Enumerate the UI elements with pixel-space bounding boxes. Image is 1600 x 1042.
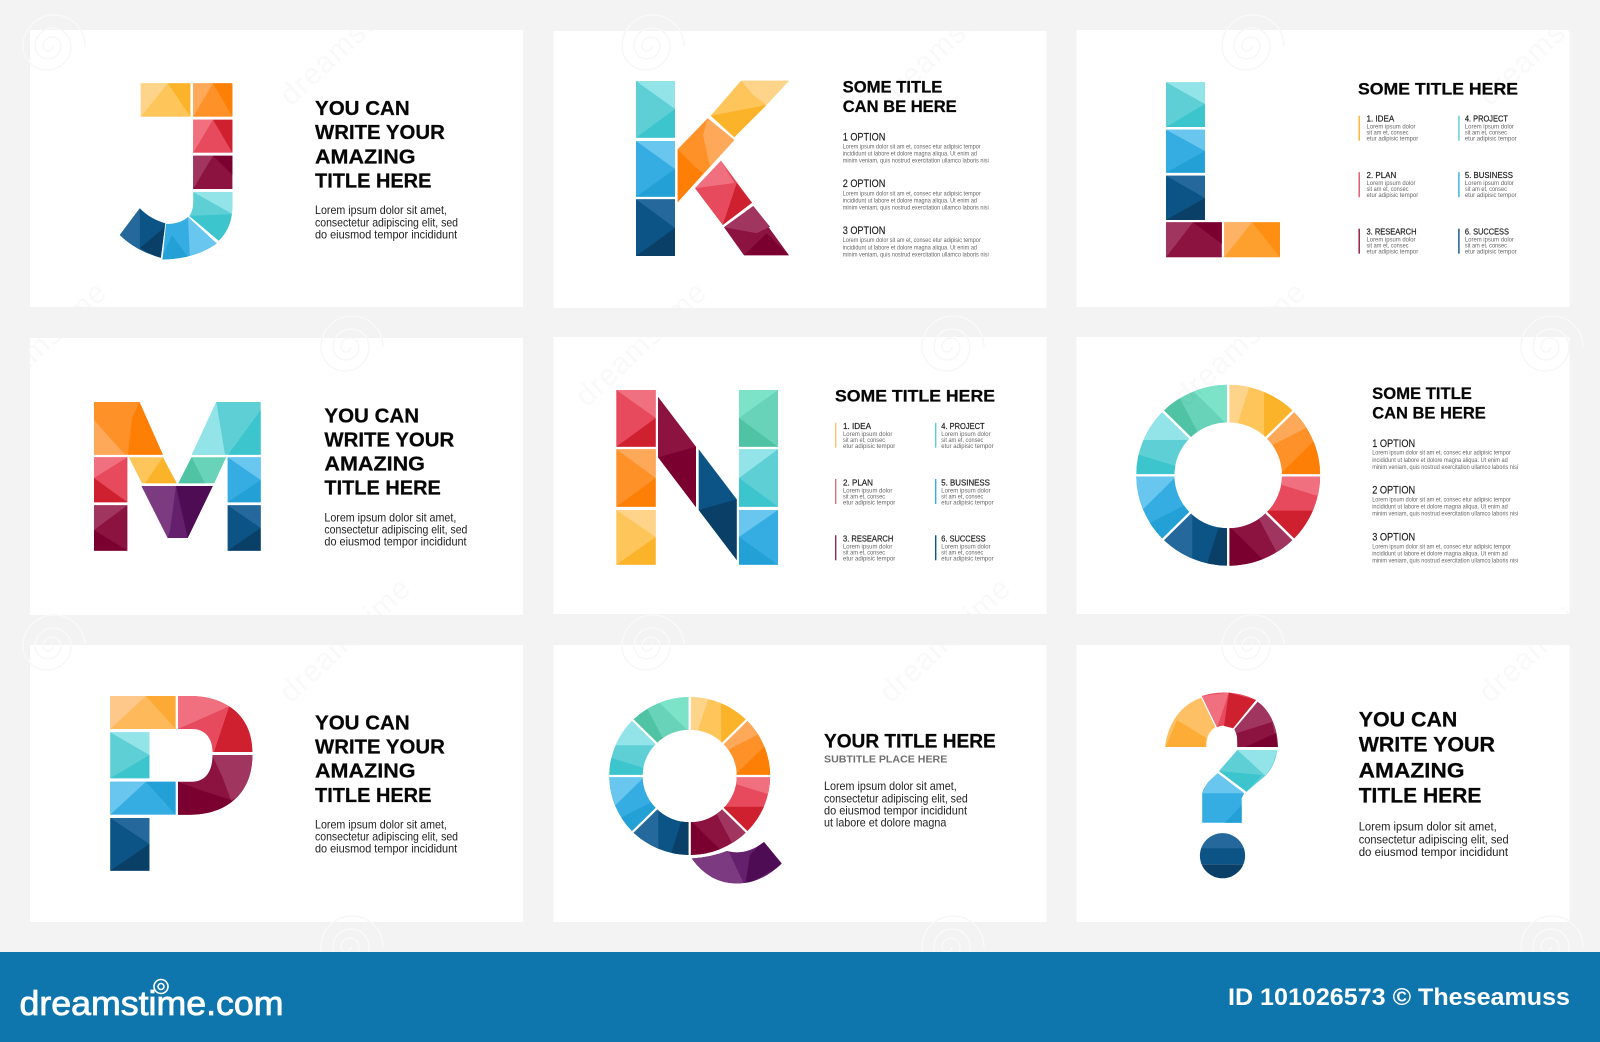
tile: purple <box>142 486 213 538</box>
tile: yellow <box>110 696 176 729</box>
items N: 6. SUCCESS <box>941 535 986 544</box>
watermark over panels: dreamstime <box>569 275 714 413</box>
options O: Lorem ipsum dolor sit am et, consec etur adipisic tempor <box>1372 544 1511 550</box>
title J: WRITE YOUR <box>315 121 445 144</box>
segment: red <box>1267 476 1320 538</box>
segment: red <box>724 777 770 831</box>
segment: green <box>634 697 689 743</box>
segment: yellow <box>690 697 746 743</box>
items L: 6. SUCCESS <box>1465 227 1509 236</box>
tile: maroon <box>193 156 232 189</box>
logo spiral <box>154 980 168 994</box>
items N: Lorem ipsum dolor <box>941 432 991 438</box>
tile: light blue <box>739 510 778 565</box>
title J: AMAZING <box>315 145 416 168</box>
title M: YOU CAN <box>324 404 419 427</box>
options O: 1 OPTION <box>1372 438 1415 450</box>
items N: sit am et, consec <box>941 551 983 557</box>
items N: Lorem ipsum dolor <box>941 545 991 551</box>
tile: orange arm <box>678 118 734 202</box>
options K: 3 OPTION <box>843 225 885 237</box>
tile: yellow <box>129 457 177 483</box>
body J: do eiusmod tempor incididunt <box>315 228 458 241</box>
title M: TITLE HERE <box>324 477 441 500</box>
body Q: ut labore et dolore magna <box>824 817 947 830</box>
tile: teal curve <box>1219 750 1277 792</box>
items N: 3. RESEARCH <box>843 535 893 544</box>
tile: maroon arc <box>1234 702 1278 747</box>
items N: etur adipisic tempor <box>843 500 895 506</box>
panel: K <box>554 31 1046 308</box>
items L: Lorem ipsum dolor <box>1465 181 1514 187</box>
segment: dark blue <box>1164 514 1227 566</box>
letter M <box>94 402 261 551</box>
tile: teal curve <box>190 192 232 241</box>
options K: Lorem ipsum dolor sit am et, consec etur adipisic tempor <box>843 144 981 150</box>
title K: CAN BE HERE <box>843 98 957 116</box>
body M: Lorem ipsum dolor sit amet, <box>324 511 456 524</box>
items L: Lorem ipsum dolor <box>1366 237 1416 243</box>
title J: YOU CAN <box>315 97 410 120</box>
tile: maroon diagonal <box>658 397 696 507</box>
tile: orange <box>193 83 232 117</box>
options O: minim veniam, quis nostrud exercitation ullamco laboris nisi <box>1372 512 1518 518</box>
items L: sit am et, consec <box>1465 243 1507 249</box>
tile: teal <box>636 81 675 138</box>
watermark over panels: dreamstime <box>873 571 1018 709</box>
body P: do eiusmod tempor incididunt <box>315 843 458 856</box>
items L: 1. IDEA <box>1366 114 1395 123</box>
items L: 2. PLAN <box>1366 171 1396 180</box>
items N: sit am et, consec <box>843 438 885 444</box>
title P <box>315 711 445 807</box>
panel: L <box>1076 30 1570 307</box>
letter K <box>636 81 789 256</box>
title question: YOU CAN <box>1359 708 1457 732</box>
body question <box>1359 820 1509 859</box>
segment: orange <box>1267 412 1320 474</box>
items L: 4. PROJECT <box>1465 114 1508 123</box>
title P: WRITE YOUR <box>315 735 445 758</box>
title P: TITLE HERE <box>315 784 431 807</box>
panel: J <box>30 30 523 307</box>
body P <box>315 818 458 856</box>
title O: CAN BE HERE <box>1372 405 1486 423</box>
title question <box>1359 708 1495 808</box>
items L: Lorem ipsum dolor <box>1366 124 1416 130</box>
panel: Q <box>554 645 1046 922</box>
tile: teal <box>739 449 778 507</box>
tile: orange <box>1224 222 1280 257</box>
items L: 5. BUSINESS <box>1465 171 1513 180</box>
body J <box>315 204 458 241</box>
tile: blue stem <box>1202 773 1244 823</box>
options O: 2 OPTION <box>1372 485 1415 497</box>
segment: light blue <box>609 777 656 831</box>
options K: incididunt ut labore et dolore magna aliqua. Ut enim ad <box>843 199 977 205</box>
letter N <box>616 390 778 565</box>
items N: 4. PROJECT <box>941 422 985 431</box>
items N: etur adipisic tempor <box>941 500 994 506</box>
options K: incididunt ut labore et dolore magna aliqua. Ut enim ad <box>843 152 977 158</box>
segment: green <box>1164 384 1227 437</box>
tile: dark blue curve <box>120 208 166 258</box>
image ID and credit: ID 101026573 © Theseamuss <box>1228 984 1570 1011</box>
items L: etur adipisic tempor <box>1366 249 1418 255</box>
tile: yellow arm <box>711 81 789 137</box>
options K: incididunt ut labore et dolore magna aliqua. Ut enim ad <box>843 245 977 251</box>
items L: etur adipisic tempor <box>1366 136 1418 142</box>
segment: orange <box>724 721 770 775</box>
title P: AMAZING <box>315 760 416 783</box>
tile: red leg <box>695 161 752 225</box>
title J: TITLE HERE <box>315 170 431 193</box>
title O <box>1372 385 1486 423</box>
items N: etur adipisic tempor <box>843 557 895 563</box>
tile: dark blue diagonal <box>699 449 737 560</box>
tile: light blue <box>228 457 261 502</box>
items N: etur adipisic tempor <box>941 444 994 450</box>
panel: question mark <box>1076 645 1570 922</box>
options O: incididunt ut labore et dolore magna aliqua. Ut enim ad <box>1372 505 1508 511</box>
options O <box>1372 438 1518 565</box>
title J <box>315 97 445 193</box>
items N: 1. IDEA <box>843 422 872 431</box>
items N: sit am et, consec <box>941 438 983 444</box>
tile: teal <box>1166 82 1205 127</box>
logo text: dreamstime.com <box>20 985 284 1023</box>
items L: Lorem ipsum dolor <box>1465 237 1514 243</box>
options K: minim veniam, quis nostrud exercitation ullamco laboris nisi <box>843 206 989 212</box>
letter O ring <box>1136 384 1320 566</box>
panel: N <box>554 337 1046 614</box>
tile: teal <box>192 402 261 455</box>
title K: SOME TITLE <box>843 79 942 97</box>
items N <box>835 422 994 563</box>
body M <box>324 511 467 549</box>
title L: SOME TITLE HERE <box>1358 79 1518 98</box>
items L: 3. RESEARCH <box>1366 227 1417 236</box>
tile: yellow <box>141 83 190 117</box>
options K: minim veniam, quis nostrud exercitation ullamco laboris nisi <box>843 252 989 258</box>
panel: M <box>30 338 523 615</box>
tile: red bowl <box>178 696 252 752</box>
watermark over panels: dreamstime <box>273 571 418 709</box>
options O: minim veniam, quis nostrud exercitation ullamco laboris nisi <box>1372 559 1518 565</box>
options K: Lorem ipsum dolor sit am et, consec etur adipisic tempor <box>843 191 981 197</box>
items L: sit am et, consec <box>1465 187 1507 193</box>
title Q: YOUR TITLE HERE <box>824 731 996 753</box>
tile: blue <box>1166 130 1205 173</box>
body M: do eiusmod tempor incididunt <box>324 536 467 549</box>
tile: yellow arc <box>1165 698 1215 747</box>
letter P <box>110 690 262 871</box>
items L: Lorem ipsum dolor <box>1465 124 1514 130</box>
title question: AMAZING <box>1359 758 1464 782</box>
tile: red <box>616 390 656 447</box>
tile: orange <box>616 449 656 507</box>
items L: sit am et, consec <box>1366 243 1408 249</box>
tile: maroon leg <box>724 206 789 255</box>
body question: Lorem ipsum dolor sit amet, <box>1359 820 1497 834</box>
options K <box>843 131 989 258</box>
items L: Lorem ipsum dolor <box>1366 181 1416 187</box>
segment: dark blue <box>634 809 689 855</box>
tile: blue <box>636 141 675 197</box>
tile: dark blue <box>636 199 675 256</box>
tile: teal <box>110 732 149 778</box>
options O: minim veniam, quis nostrud exercitation ullamco laboris nisi <box>1372 465 1518 471</box>
tile: yellow <box>616 510 656 565</box>
title question: TITLE HERE <box>1359 784 1481 808</box>
letter Q ring <box>609 697 770 855</box>
tile: dark blue <box>110 818 149 871</box>
segment: light blue <box>1136 476 1190 538</box>
body P: Lorem ipsum dolor sit amet, <box>315 818 447 831</box>
items N: Lorem ipsum dolor <box>941 488 991 494</box>
items L: etur adipisic tempor <box>1465 249 1517 255</box>
title M: AMAZING <box>324 453 425 476</box>
segment: maroon <box>1229 514 1292 566</box>
tile: green <box>739 390 778 447</box>
options O: incididunt ut labore et dolore magna aliqua. Ut enim ad <box>1372 552 1508 558</box>
tile: red <box>193 120 232 153</box>
items L: sit am et, consec <box>1366 130 1408 136</box>
items N: Lorem ipsum dolor <box>843 488 892 494</box>
title O: SOME TITLE <box>1372 385 1472 403</box>
panel: O <box>1076 337 1570 614</box>
items L: sit am et, consec <box>1465 130 1507 136</box>
options O: Lorem ipsum dolor sit am et, consec etur adipisic tempor <box>1372 497 1511 503</box>
title N: SOME TITLE HERE <box>835 387 995 406</box>
items N: 2. PLAN <box>843 478 873 487</box>
tile: green <box>178 457 226 483</box>
items L <box>1358 114 1517 255</box>
subtitle Q: SUBTITLE PLACE HERE <box>824 754 947 766</box>
items N: etur adipisic tempor <box>843 444 895 450</box>
letter L <box>1166 82 1280 257</box>
segment: teal <box>609 721 656 775</box>
tile: maroon bowl <box>178 755 252 815</box>
title question: WRITE YOUR <box>1359 733 1495 757</box>
body Q: Lorem ipsum dolor sit amet, <box>824 780 957 793</box>
options K: 2 OPTION <box>843 178 885 190</box>
title M: WRITE YOUR <box>324 429 454 452</box>
options K: 1 OPTION <box>843 131 885 143</box>
items N: Lorem ipsum dolor <box>843 432 892 438</box>
body P: consectetur adipiscing elit, sed <box>315 831 458 844</box>
tile: orange <box>94 402 163 455</box>
segment: maroon <box>690 809 746 855</box>
segment: yellow <box>1229 384 1292 438</box>
body Q: do eiusmod tempor incididunt <box>824 804 968 817</box>
body Q <box>824 780 968 830</box>
footer banner <box>0 952 1600 1042</box>
body question: do eiusmod tempor incididunt <box>1359 845 1509 859</box>
question mark glyph <box>1165 692 1278 880</box>
tile: red <box>94 457 127 502</box>
items L: etur adipisic tempor <box>1465 136 1517 142</box>
body M: consectetur adipiscing elit, sed <box>324 524 467 537</box>
options K: minim veniam, quis nostrud exercitation ullamco laboris nisi <box>843 159 989 165</box>
body question: consectetur adipiscing elit, sed <box>1359 832 1509 846</box>
tile: maroon <box>94 505 127 551</box>
items N: 5. BUSINESS <box>941 478 990 487</box>
tile: blue <box>110 782 176 815</box>
title M <box>324 404 454 500</box>
options K: Lorem ipsum dolor sit am et, consec etur adipisic tempor <box>843 238 981 244</box>
tile: dark blue <box>1166 176 1205 220</box>
items N: Lorem ipsum dolor <box>843 545 892 551</box>
items N: etur adipisic tempor <box>941 557 994 563</box>
items N: sit am et, consec <box>941 494 983 500</box>
letter J <box>118 83 236 262</box>
tile: maroon <box>1166 222 1222 257</box>
segment: teal <box>1136 412 1190 474</box>
options O: Lorem ipsum dolor sit am et, consec etur adipisic tempor <box>1372 451 1511 457</box>
tile: dark blue <box>228 505 261 551</box>
tile: blue curve <box>162 217 217 260</box>
options O: incididunt ut labore et dolore magna aliqua. Ut enim ad <box>1372 458 1508 464</box>
title P: YOU CAN <box>315 711 410 734</box>
body J: Lorem ipsum dolor sit amet, <box>315 204 447 217</box>
options O: 3 OPTION <box>1372 532 1415 544</box>
items L: sit am et, consec <box>1366 187 1408 193</box>
body Q: consectetur adipiscing elit, sed <box>824 792 968 805</box>
Q tail <box>692 842 782 884</box>
title K <box>843 79 957 116</box>
items N: sit am et, consec <box>843 494 885 500</box>
body J: consectetur adipiscing elit, sed <box>315 216 458 229</box>
dot <box>1200 833 1246 878</box>
watermark over panels: dreamstime <box>1168 275 1313 413</box>
panel: P <box>30 645 523 922</box>
items N: sit am et, consec <box>843 551 885 557</box>
items L: etur adipisic tempor <box>1465 193 1517 199</box>
items L: etur adipisic tempor <box>1366 193 1418 199</box>
tile: red arc <box>1202 692 1256 728</box>
